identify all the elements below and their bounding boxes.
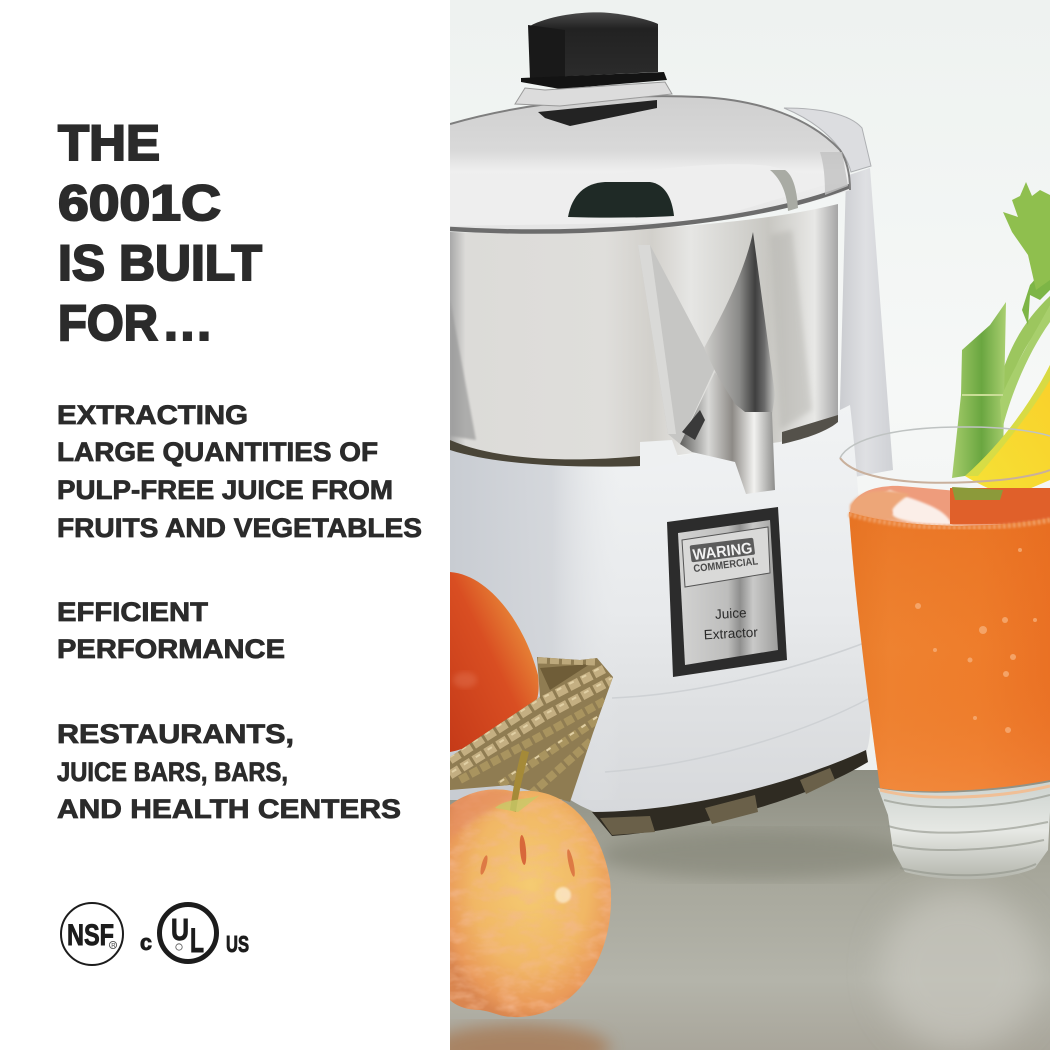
text block: efficient performance: EFFICIENT [57,597,209,627]
wicker basket [450,657,613,802]
juicer back column [838,168,893,480]
text block: venues: JUICE BARS, BARS, [57,757,288,787]
photo background wall [450,0,1050,790]
juice droplets [915,548,1037,733]
title: 6001C [58,175,221,231]
label plate: WARING [692,540,753,564]
title [58,115,262,351]
juicer base [450,405,872,836]
chrome bowl [450,204,838,467]
text block: venues: AND HEALTH CENTERS [57,794,401,824]
chrome lid [450,96,850,233]
lemon wedge [965,365,1050,497]
text block: extracting: EXTRACTING [57,400,248,430]
text block: extracting: FRUITS AND VEGETABLES [57,513,422,543]
dark lid opening [568,182,674,218]
text block: venues [57,719,401,824]
label plate: COMMERCIAL [693,555,759,575]
icon: NSF certification [61,903,123,965]
icon: cULus certification: US [226,931,249,957]
label plate: Juice [715,605,747,622]
base collar tab [640,440,678,460]
label plate [667,507,787,677]
dark feet under base [592,750,868,836]
lid side reflection [770,170,798,211]
icon: cULus certification: U [171,912,189,947]
product photo [430,0,1050,1050]
icon: cULus certification: L [190,922,204,960]
mango [450,572,539,752]
icon: cULus certification: c [140,930,152,955]
glass foot [878,782,1050,879]
celery garnish [952,182,1050,478]
apple stem [510,750,529,812]
text block: efficient performance: PERFORMANCE [57,634,285,664]
text block: extracting [57,400,422,543]
title: FOR [58,295,158,351]
glass of juice [840,427,1050,879]
icon: cULus certification [140,904,249,962]
title: THE [58,115,160,171]
icon: NSF certification: R [111,944,116,950]
text block: efficient performance [57,597,285,664]
black lid knob [515,12,672,126]
title: ... [164,295,211,351]
text block: extracting: LARGE QUANTITIES OF [57,437,378,467]
juice body [849,512,1050,791]
title: IS BUILT [58,235,262,291]
left text panel [0,0,450,1050]
icon: NSF certification: NSF [67,919,114,952]
text block: venues: RESTAURANTS, [57,719,294,749]
juice surface inside glass [850,486,1004,526]
counter surface [430,770,1050,1050]
label plate: Extractor [703,625,759,642]
lid handle tab [784,108,871,172]
text block: extracting: PULP-FREE JUICE FROM [57,475,393,505]
juice spout [638,232,775,494]
apple [450,750,615,1020]
